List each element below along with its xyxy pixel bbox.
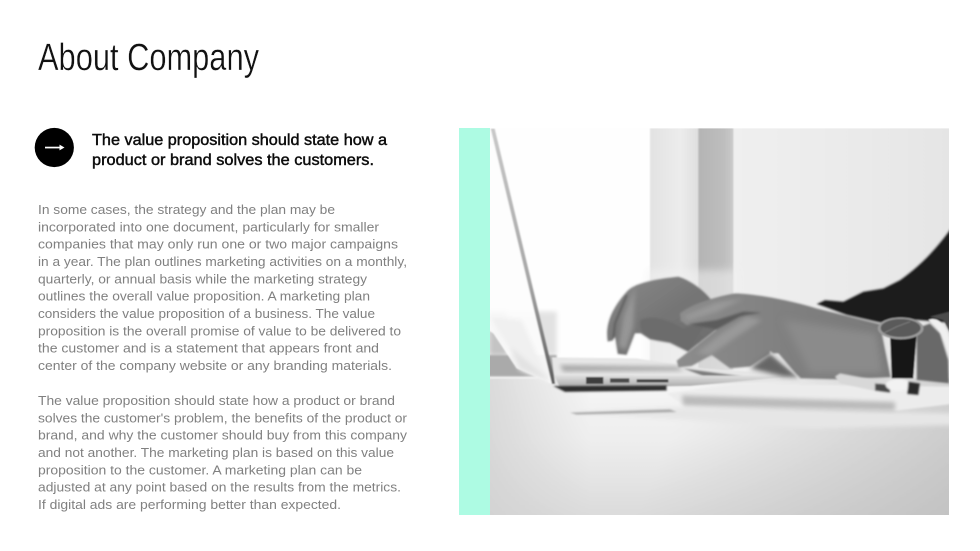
wristwatch [878, 317, 924, 378]
text block: first paragraph: proposition is the overall promise of value to be delivered to [38, 323, 401, 338]
mint accent bar [459, 128, 490, 515]
table [490, 378, 949, 515]
text block: first paragraph: quarterly, or annual basis while the marketing strategy [38, 271, 367, 286]
wrist and shirt cuff [917, 312, 950, 383]
text block: first paragraph: In some cases, the strategy and the plan may be [38, 202, 335, 217]
subheading [92, 132, 387, 169]
text block: second paragraph: The value proposition should state how a product or brand [38, 393, 395, 408]
wall background [649, 128, 949, 378]
far hand [607, 277, 720, 355]
subheading: product or brand solves the customers. [92, 152, 374, 169]
text block: first paragraph: the customer and is a statement that appears front and [38, 341, 379, 356]
cup behind laptop [490, 310, 558, 378]
text block: first paragraph: considers the value proposition of a business. The value [38, 306, 375, 321]
text block: second paragraph: proposition to the customer. A marketing plan can be [38, 462, 362, 477]
text block: second paragraph [38, 393, 408, 512]
text block: second paragraph: adjusted at any point based on the results from the metrics. [38, 480, 401, 495]
text block: second paragraph: If digital ads are performing better than expected. [38, 497, 341, 512]
text block: first paragraph [38, 202, 407, 373]
notebook and papers [570, 384, 957, 428]
near hand [677, 293, 891, 379]
laptop screen [490, 128, 556, 385]
text block: second paragraph: solves the customer's problem, the benefits of the product or [38, 410, 408, 425]
icon: arrow in black circle [35, 128, 74, 167]
laptop base and keyboard [552, 357, 797, 392]
dark jacket sleeve [816, 228, 949, 324]
text block: first paragraph: incorporated into one document, particularly for smaller [38, 219, 380, 234]
text block: first paragraph: in a year. The plan outlines marketing activities on a monthly, [38, 254, 407, 269]
text block: first paragraph: center of the company website or any branding materials. [38, 358, 392, 373]
photo: hands typing on laptop [490, 128, 949, 515]
text block: first paragraph: companies that may only run one or two major campaigns [38, 237, 398, 252]
text block: second paragraph: brand, and why the customer should buy from this company [38, 428, 407, 443]
text block: second paragraph: and not another. The marketing plan is based on this value [38, 445, 394, 460]
title: About Company [38, 37, 259, 79]
subheading: The value proposition should state how a [92, 132, 387, 149]
text block: first paragraph: outlines the overall value proposition. A marketing plan [38, 289, 370, 304]
pen [835, 373, 920, 395]
